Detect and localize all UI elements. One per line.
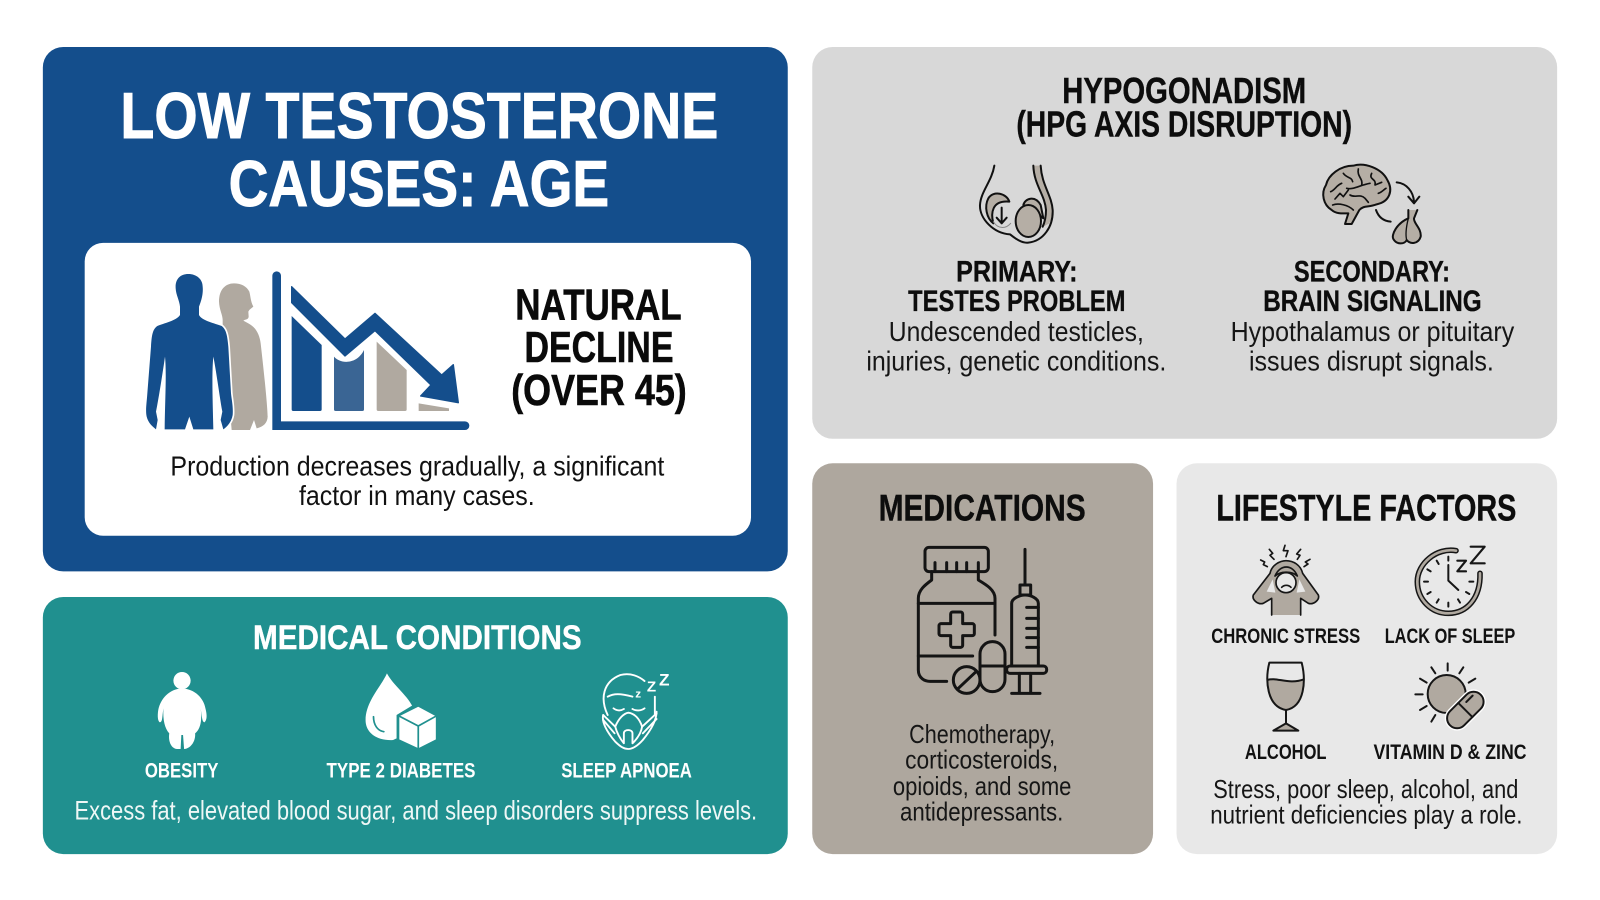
heading: primary: PRIMARY: [956, 256, 1078, 289]
heading: natural decline: (OVER 45) [511, 366, 687, 415]
text: production description: factor in many cases. [299, 480, 535, 511]
text: primary description: Undescended testicles, [889, 316, 1144, 347]
text: production description [170, 451, 665, 511]
heading: secondary [1263, 256, 1482, 318]
icon: clock lack of sleep [1417, 547, 1485, 613]
label: chronic stress: CHRONIC STRESS [1211, 624, 1360, 648]
heading: natural decline [511, 280, 687, 415]
heading: secondary: SECONDARY: [1294, 256, 1450, 289]
heading: lifestyle factors: LIFESTYLE FACTORS [1216, 487, 1516, 528]
text: medications description [893, 721, 1071, 826]
text: production description: Production decreases gradually, a significant [170, 451, 665, 482]
label: alcohol: ALCOHOL [1245, 740, 1327, 764]
text: medications description: Chemotherapy, [909, 721, 1055, 749]
icon: sleep apnoea mask: Z [659, 671, 670, 690]
text: lifestyle description [1210, 776, 1522, 829]
icon: sleep apnoea mask [603, 671, 670, 749]
icon: obesity [158, 672, 207, 749]
text: primary description: injuries, genetic conditions. [866, 345, 1166, 376]
icon: age figures and declining chart [146, 271, 469, 430]
label: obesity: OBESITY [145, 759, 218, 783]
icon: blood drop and sugar cube [366, 673, 437, 749]
text: medications description: opioids, and some [893, 773, 1071, 801]
label: type 2 diabetes: TYPE 2 DIABETES [327, 759, 476, 783]
panel: natural decline card [85, 243, 751, 536]
heading: primary: TESTES PROBLEM [908, 285, 1126, 318]
heading: hypogonadism: HYPOGONADISM [1062, 71, 1306, 111]
text: conditions description: Excess fat, elevated blood sugar, and sleep disorders suppress levels. [74, 795, 757, 825]
icon: testes [980, 166, 1053, 243]
icon: pill bottle and syringe [918, 547, 1047, 693]
heading: natural decline: NATURAL [515, 280, 682, 329]
icon: sleep apnoea mask: Z [647, 680, 656, 696]
panel: hypogonadism [812, 47, 1557, 439]
text: secondary description [1231, 316, 1514, 376]
title [120, 79, 718, 220]
label: vitamin D and zinc: VITAMIN D & ZINC [1373, 740, 1527, 764]
heading: medical conditions: MEDICAL CONDITIONS [253, 619, 582, 657]
icon: sleep apnoea mask: z [635, 689, 641, 701]
heading: hypogonadism: (HPG AXIS DISRUPTION) [1016, 105, 1352, 145]
heading: hypogonadism [1016, 71, 1352, 145]
panel: age [43, 47, 788, 571]
text: lifestyle description: Stress, poor sleep, alcohol, and [1213, 776, 1518, 804]
panel: medical conditions [43, 597, 788, 854]
icon: vitamin D sun and zinc capsule [1415, 663, 1488, 732]
panel: medications [812, 463, 1153, 854]
heading: primary [908, 256, 1126, 318]
icon: chronic stress [1253, 545, 1319, 615]
label: lack of sleep: LACK OF SLEEP [1385, 624, 1515, 648]
text: secondary description: Hypothalamus or pituitary [1231, 316, 1514, 347]
heading: secondary: BRAIN SIGNALING [1263, 285, 1482, 318]
title: LOW TESTOSTERONE [120, 79, 718, 152]
label: sleep apnoea: SLEEP APNOEA [561, 759, 692, 783]
icon: brain and gland signal [1323, 165, 1421, 243]
text: lifestyle description: nutrient deficiencies play a role. [1210, 801, 1522, 829]
icon: wine glass [1267, 663, 1304, 731]
title: CAUSES: AGE [229, 147, 609, 220]
text: primary description [866, 316, 1166, 376]
heading: natural decline: DECLINE [524, 323, 673, 372]
heading: medications: MEDICATIONS [879, 487, 1086, 528]
text: secondary description: issues disrupt signals. [1249, 345, 1494, 376]
text: medications description: corticosteroids, [905, 746, 1058, 774]
text: medications description: antidepressants. [900, 798, 1063, 826]
panel: lifestyle factors [1177, 463, 1557, 854]
